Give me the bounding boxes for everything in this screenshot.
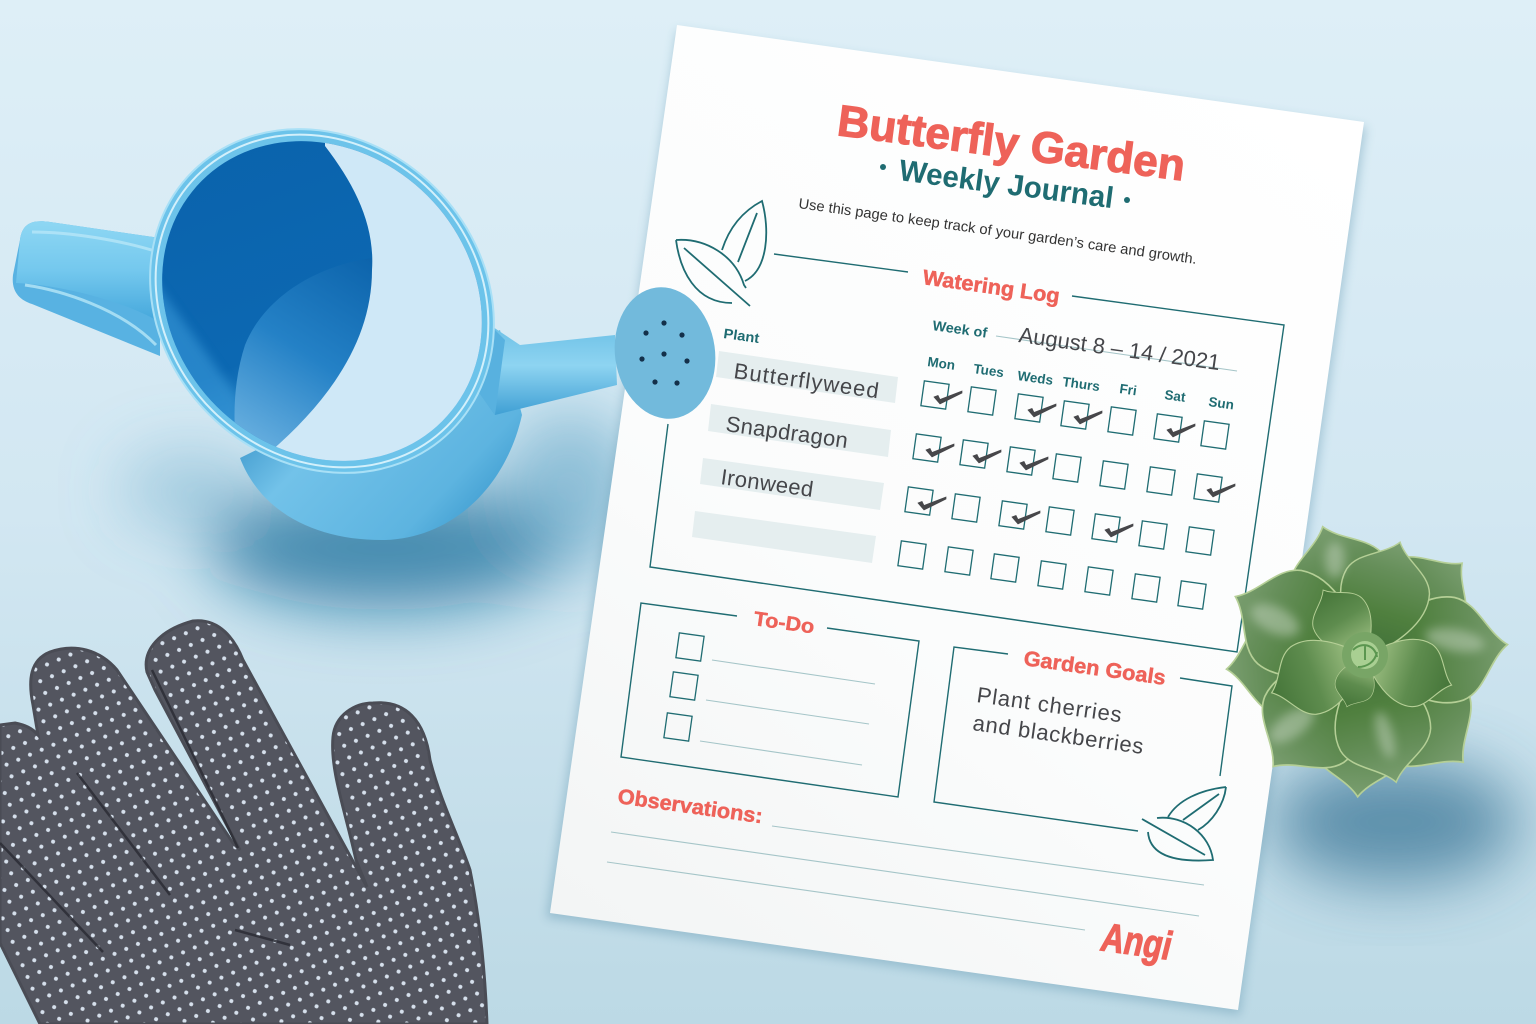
goal handwriting [971,682,1145,759]
interior [162,141,482,461]
day headings: Weds [1017,368,1054,388]
panel: to-do [621,603,919,797]
panel: garden goals [934,647,1232,831]
icon: leaves top [676,201,766,306]
plant name: ironweed: Ironweed [719,464,815,502]
heading: to-do: To-Do [752,608,816,638]
check marks [918,391,1235,537]
plant label: Plant [723,325,761,346]
day headings: Sun [1208,394,1235,413]
spout rose [606,281,724,425]
day headings [927,354,1235,413]
glove [0,621,487,1024]
shadow: paper [546,30,1366,1015]
heading: watering log: Watering Log [921,266,1061,308]
plant row shading [692,351,898,563]
sunlit crescent [276,143,482,461]
checkbox grid [898,381,1229,609]
intro text: Use this page to keep track of your garden’s care and growth. [797,196,1198,268]
title: Butterfly Garden [835,96,1188,191]
heading: observations: Observations: [616,785,764,828]
subtitle: Weekly Journal [897,154,1116,215]
rim [79,58,565,544]
rim highlight [87,66,557,536]
interior floor [234,272,369,446]
to-do lines [700,660,875,765]
to-do checkboxes [664,633,704,741]
goal handwriting: and blackberries [971,710,1145,759]
day headings: Sat [1164,387,1187,405]
lit lower-left wall [162,288,236,422]
spout [472,325,617,415]
day headings: Mon [927,354,956,373]
observation lines [607,826,1204,930]
rosette centre [1342,632,1388,678]
watering can [12,128,716,540]
heading: garden goals: Garden Goals [1022,647,1167,690]
goal handwriting: Plant cherries [975,682,1123,727]
shadow: succulent [1270,760,1520,884]
can body [240,330,522,540]
pot [1252,557,1458,763]
paper sheet [550,25,1364,1010]
day headings: Tues [973,361,1005,380]
plant name: butterflyweed: Butterflyweed [732,358,880,403]
inner petals [1258,575,1462,727]
day headings: Fri [1119,381,1138,398]
week of date: August 8 – 14 / 2021 [1017,322,1222,375]
logo: Angi: Angi [1097,916,1177,968]
succulent plant [1213,511,1512,801]
shadow: watering can [120,410,640,610]
handle [13,221,160,356]
petal highlights [1246,542,1486,760]
outer petals [1213,511,1512,801]
week of label: Week of [932,317,989,341]
plant name: snapdragon: Snapdragon [724,411,850,453]
icon: leaves bottom [1142,787,1226,861]
day headings: Thurs [1062,374,1101,394]
panel: watering log frame [650,254,1284,652]
